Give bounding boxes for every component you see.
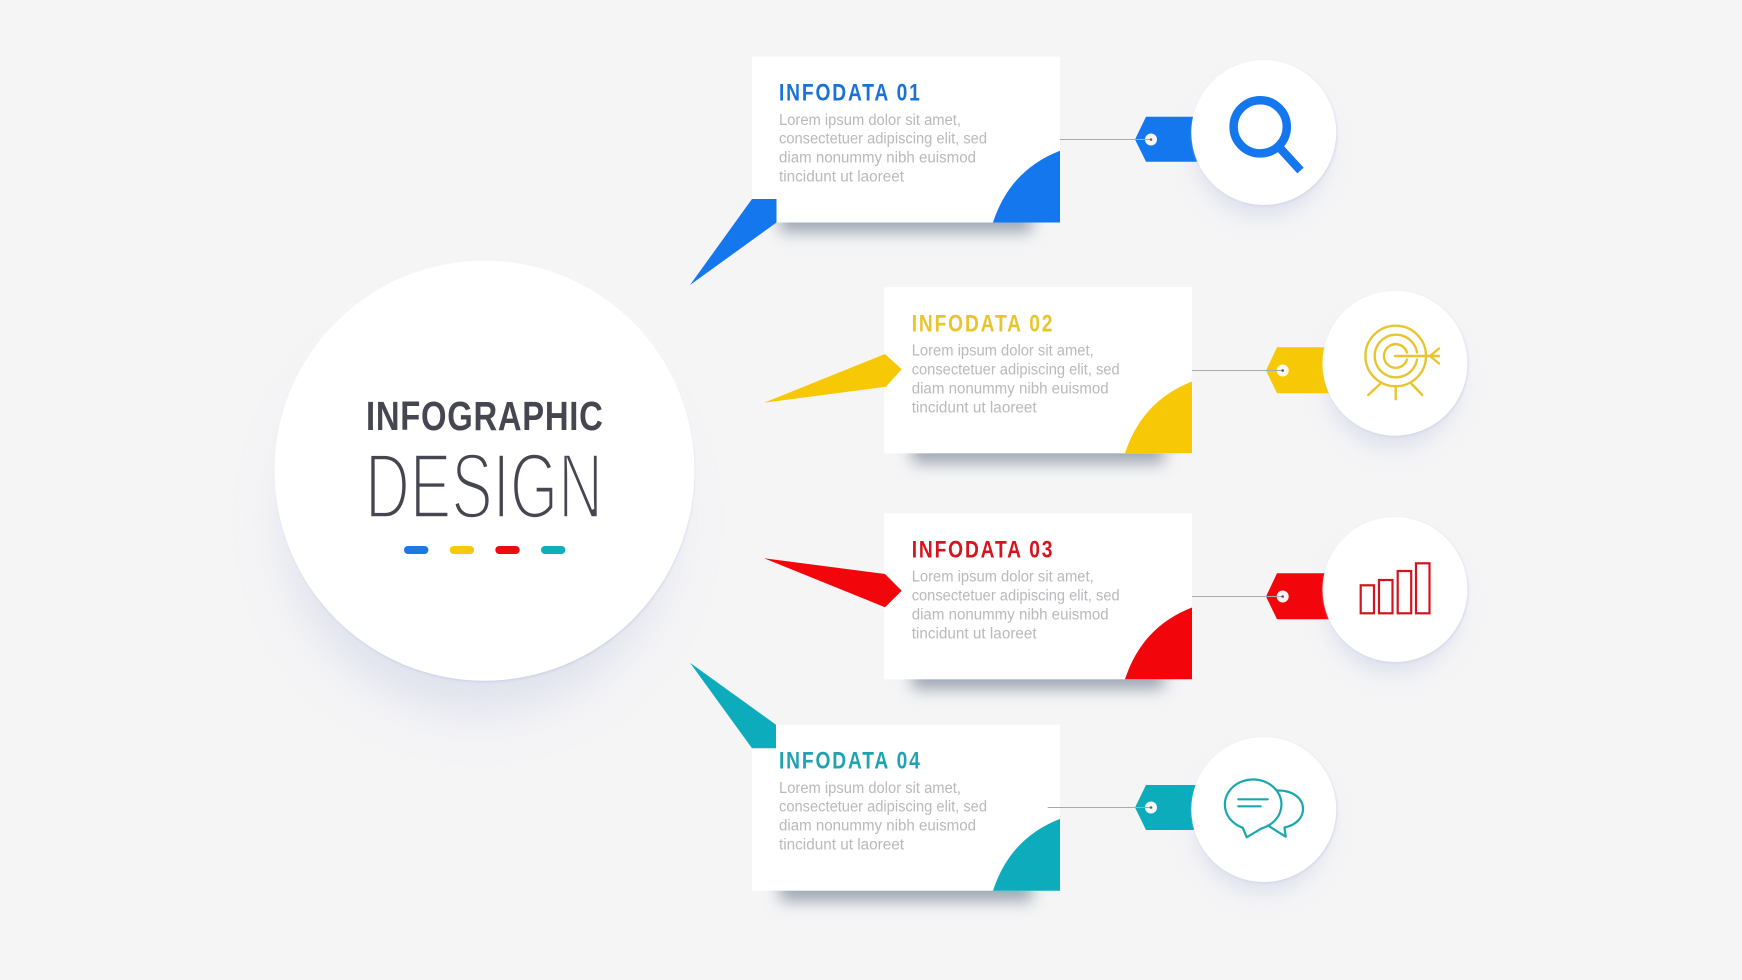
- panel: infodata 02: [764, 287, 1192, 463]
- body text: [912, 569, 1120, 642]
- connector: chat tag and badge: [1048, 737, 1337, 892]
- heading: INFODATA 03: [912, 535, 1053, 563]
- panel: infodata 04: [690, 663, 1060, 901]
- body text: diam nonummy nibh euismod: [779, 818, 976, 835]
- body text: tincidunt ut laoreet: [912, 399, 1037, 416]
- pointer: [764, 558, 902, 607]
- body text: tincidunt ut laoreet: [779, 837, 905, 854]
- body text: diam nonummy nibh euismod: [912, 380, 1109, 397]
- pointer: [690, 663, 776, 748]
- body text: consectetuer adipiscing elit, sed: [779, 131, 987, 148]
- icon: target: [1365, 326, 1439, 399]
- body text: Lorem ipsum dolor sit amet,: [912, 569, 1094, 586]
- title: DESIGN: DESIGN: [365, 434, 603, 538]
- panel: infodata 01: [690, 56, 1060, 285]
- body text: [779, 780, 987, 854]
- body text: Lorem ipsum dolor sit amet,: [912, 343, 1094, 360]
- body text: diam nonummy nibh euismod: [912, 606, 1109, 623]
- icon: magnifier: [1234, 100, 1300, 170]
- body text: consectetuer adipiscing elit, sed: [912, 587, 1120, 604]
- panel: central circle: [274, 261, 694, 712]
- body text: [779, 112, 987, 186]
- body text: tincidunt ut laoreet: [779, 169, 905, 186]
- connector: bars tag and badge: [1192, 517, 1468, 672]
- heading: INFODATA 02: [912, 309, 1053, 337]
- body text: Lorem ipsum dolor sit amet,: [779, 780, 961, 797]
- icon: chat bubbles: [1225, 779, 1303, 837]
- heading: INFODATA 01: [779, 78, 920, 106]
- icon: bar chart: [1361, 563, 1430, 613]
- body text: diam nonummy nibh euismod: [779, 150, 976, 167]
- body text: consectetuer adipiscing elit, sed: [912, 361, 1120, 378]
- title: INFOGRAPHIC: INFOGRAPHIC: [366, 392, 603, 439]
- body text: [912, 343, 1120, 416]
- panel: infodata 03: [764, 513, 1192, 689]
- body text: Lorem ipsum dolor sit amet,: [779, 112, 961, 129]
- body text: consectetuer adipiscing elit, sed: [779, 799, 987, 816]
- pointer: [690, 199, 776, 285]
- colour dots: [404, 546, 565, 554]
- connector: target tag and badge: [1192, 291, 1468, 447]
- pointer: [764, 354, 902, 403]
- heading: INFODATA 04: [779, 747, 920, 774]
- connector: search tag and badge: [1060, 60, 1337, 216]
- body text: tincidunt ut laoreet: [912, 625, 1037, 642]
